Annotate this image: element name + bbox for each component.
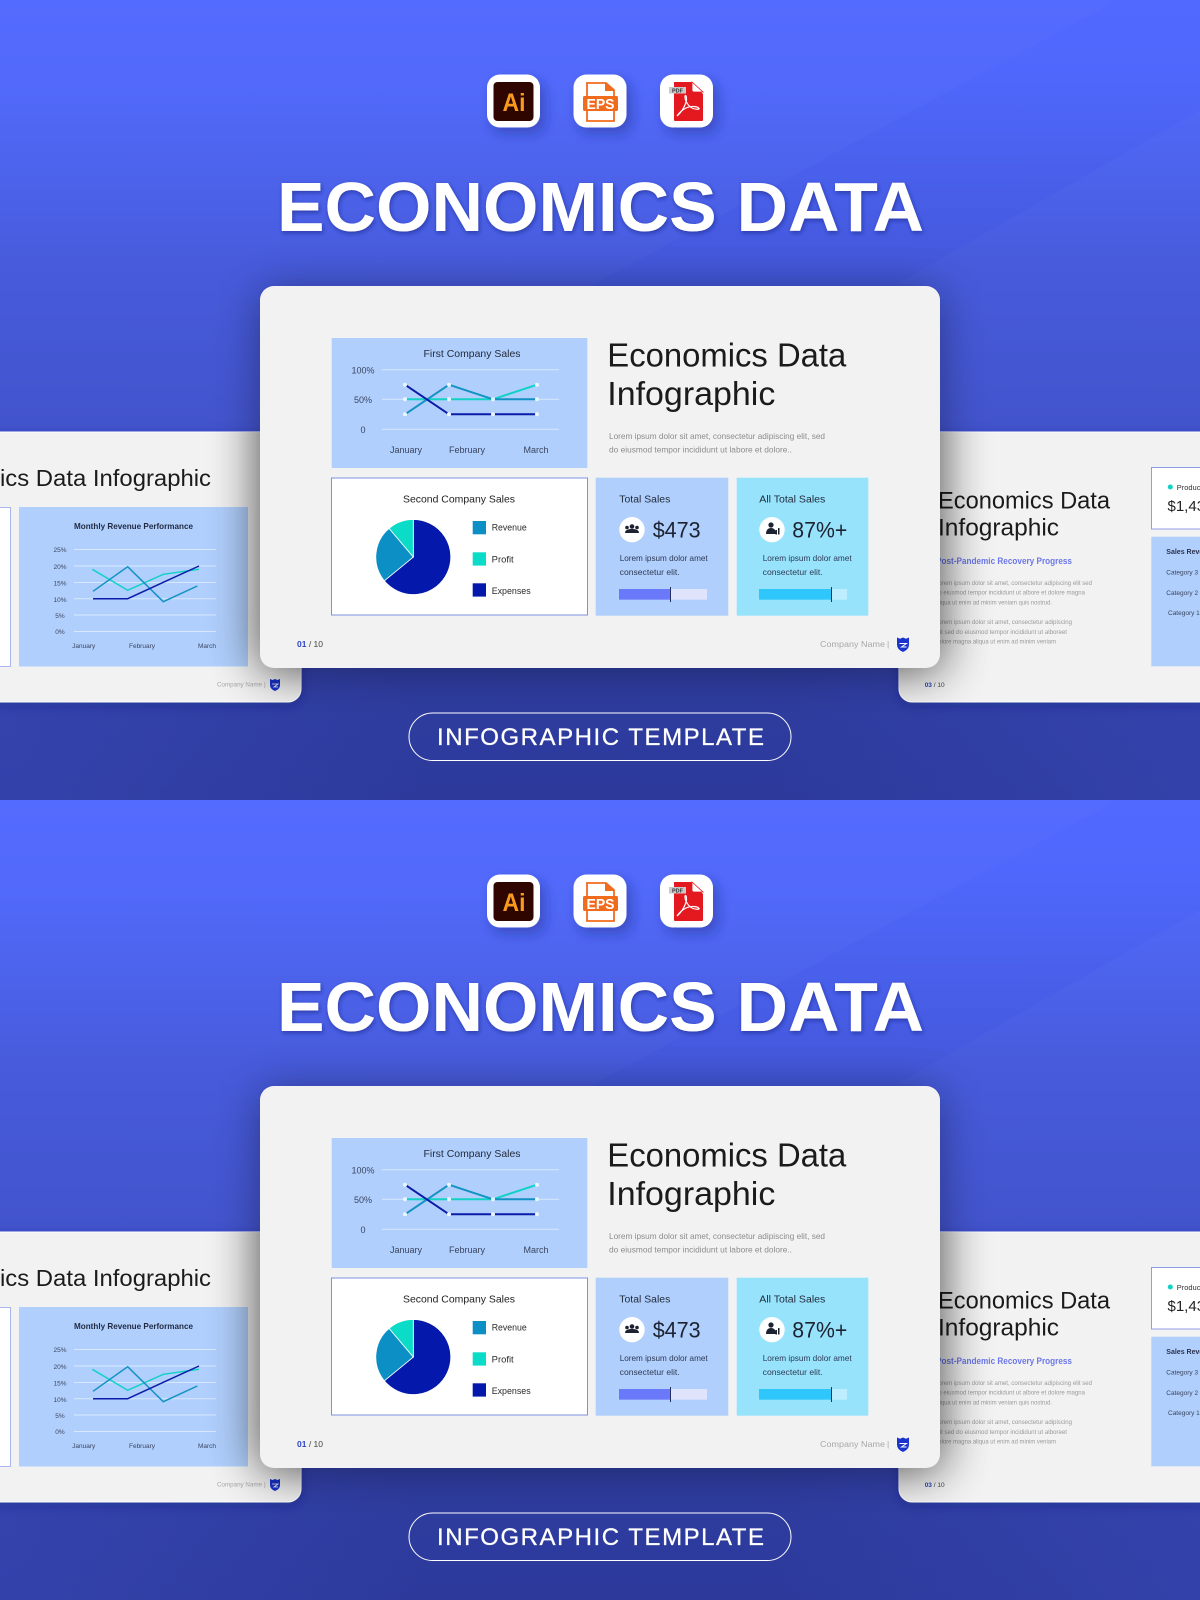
body text: [935, 581, 1092, 646]
legend: [473, 521, 531, 597]
subtitle pill: [409, 1513, 791, 1560]
line chart: monthly revenue: 20%: [53, 564, 67, 571]
page number: 03 / 10: [925, 1482, 945, 1489]
stat card: total sales: Total Sales: [619, 495, 670, 506]
icon: EPS file: EPS: [586, 96, 614, 113]
top tile: [0, 0, 1200, 800]
line chart: monthly revenue: 15%: [53, 580, 67, 588]
line chart: monthly revenue: February: [129, 643, 156, 650]
pie chart: second company sales: Second Company Sales: [403, 494, 515, 506]
panel: right slide: [899, 1232, 1200, 1502]
format icons: [487, 874, 713, 928]
icon: PDF file: [660, 874, 713, 928]
body text: aliqua ut enim ad minim veniam quis nostrud.: [935, 1400, 1052, 1406]
line chart: monthly revenue: January: [72, 1443, 96, 1450]
line chart: first company sales: 0: [360, 425, 366, 435]
line chart: first company sales: 100%: [351, 366, 375, 376]
body text: [935, 1381, 1092, 1446]
line chart: first company sales: January: [390, 445, 423, 455]
stat card: all total sales: [737, 1278, 868, 1416]
line chart: monthly revenue: 0%: [55, 1429, 65, 1436]
legend: Expenses: [492, 586, 531, 596]
icon: EPS file: [574, 874, 626, 928]
white panel: [0, 1308, 10, 1466]
body text: dolore magna aliqua ut enim ad minim veniam: [935, 1440, 1056, 1446]
slide heading: [938, 1287, 1111, 1341]
line chart: first company sales: February: [449, 1245, 486, 1255]
line chart: first company sales: 0: [360, 1225, 366, 1235]
body text: do eiusmod tempor incididunt ut labore et dolore..: [609, 1245, 792, 1255]
slide heading: Infographic: [607, 376, 775, 413]
stat card: all total sales: Lorem ipsum dolor amet: [763, 1353, 852, 1363]
body text: [609, 431, 825, 455]
line chart: monthly revenue: January: [72, 643, 96, 650]
legend: Profit: [492, 555, 514, 565]
slide heading: [938, 487, 1111, 541]
line chart: first company sales: First Company Sales: [424, 1148, 520, 1160]
progress bar: [759, 1387, 847, 1402]
line chart: first company sales: February: [449, 445, 486, 455]
sales revenue card: Category 2: [1166, 1390, 1198, 1397]
line chart: monthly revenue: 5%: [55, 1413, 65, 1420]
line chart: first company sales: First Company Sales: [424, 348, 520, 360]
slide heading: [607, 1138, 847, 1213]
company footer: |: [887, 1439, 889, 1449]
body text: Lorem ipsum dolor sit amet, consectetur adipiscing: [935, 620, 1072, 626]
body text: Lorem ipsum dolor sit amet, consectetur adipiscing elit, sed: [609, 1231, 825, 1241]
stat card: all total sales: Lorem ipsum dolor amet: [763, 553, 852, 563]
body text: Lorem ipsum dolor sit amet, consectetur adipiscing elit sed: [935, 581, 1092, 587]
progress bar: [619, 587, 707, 602]
title: ECONOMICS DATA: [277, 168, 924, 246]
line chart: monthly revenue: 10%: [53, 597, 67, 604]
company footer: Company Name: [820, 639, 885, 649]
icon: team: [619, 1317, 645, 1342]
page number: 03 / 10: [925, 682, 945, 689]
line chart: monthly revenue: 25%: [53, 547, 67, 554]
panel: main slide: [260, 1086, 940, 1468]
company footer: [820, 1438, 909, 1452]
slide heading: Economics Data: [938, 487, 1111, 514]
line chart: first company sales: March: [523, 445, 549, 455]
body text: dolore magna aliqua ut enim ad minim veniam: [935, 640, 1056, 646]
icon: PDF file: PDF: [672, 88, 684, 94]
background: [0, 800, 1200, 1600]
line chart: monthly revenue: Monthly Revenue Performance: [74, 1321, 193, 1331]
stat card: total sales: [596, 478, 728, 616]
slide heading: Economics Data: [938, 1287, 1111, 1314]
sales revenue card: Category 3: [1166, 1370, 1198, 1377]
stat card: all total sales: consectetur elit.: [763, 1367, 823, 1377]
subheading: Post-Pandemic Recovery Progress: [936, 1356, 1072, 1366]
background: [0, 0, 1200, 800]
stat card: total sales: consectetur elit.: [620, 1367, 680, 1377]
body text: [609, 1231, 825, 1255]
stat card: all total sales: consectetur elit.: [763, 567, 823, 577]
panel: left slide: [0, 432, 301, 702]
stat card: all total sales: All Total Sales: [759, 495, 825, 506]
sales revenue card: Category 1: [1168, 1410, 1200, 1417]
product card: [1152, 468, 1200, 529]
company footer: Company Name: [820, 1439, 885, 1449]
icon: Adobe Illustrator: [487, 74, 540, 128]
panel: main slide: [260, 286, 940, 668]
body text: elit sed do eiusmod tempor incididunt ut alboreet: [935, 630, 1067, 636]
icon: PDF file: [660, 74, 713, 128]
line chart: monthly revenue: 5%: [55, 613, 65, 620]
icon: PDF file: PDF: [672, 888, 684, 894]
line chart: first company sales: March: [523, 1245, 549, 1255]
page number: 01 / 10: [297, 639, 323, 649]
line chart: monthly revenue: February: [129, 1443, 156, 1450]
line chart: monthly revenue: Monthly Revenue Performance: [74, 521, 193, 531]
stat card: total sales: $473: [653, 517, 701, 542]
stat card: all total sales: 87%+: [792, 1317, 847, 1342]
line chart: monthly revenue: 10%: [53, 1397, 67, 1404]
slide heading: Economics Data: [607, 338, 847, 375]
line chart: first company sales: [332, 1138, 587, 1268]
title: ECONOMICS DATA: [277, 968, 924, 1046]
line chart: first company sales: January: [390, 1245, 423, 1255]
slide heading: Economics Data: [607, 1138, 847, 1175]
slide heading: Infographic: [938, 514, 1059, 541]
progress bar: [759, 587, 847, 602]
icon: person with chart: [759, 517, 785, 542]
slide footer: Company Name: [217, 682, 262, 688]
legend: Profit: [492, 1355, 514, 1365]
company footer: |: [887, 639, 889, 649]
body text: aliqua ut enim ad minim veniam quis nostrud.: [935, 600, 1052, 606]
line chart: monthly revenue: March: [198, 643, 216, 650]
stat card: total sales: Lorem ipsum dolor amet: [620, 1353, 708, 1363]
slide heading: ics Data Infographic: [0, 465, 211, 491]
line chart: first company sales: [332, 338, 587, 468]
legend: Revenue: [492, 523, 527, 533]
icon: EPS file: [574, 74, 626, 128]
slide footer: [217, 1479, 280, 1491]
stat card: total sales: Lorem ipsum dolor amet: [620, 553, 708, 563]
subtitle pill: INFOGRAPHIC TEMPLATE: [437, 1524, 764, 1551]
subheading: Post-Pandemic Recovery Progress: [936, 556, 1072, 566]
body text: Lorem ipsum dolor sit amet, consectetur adipiscing: [935, 1420, 1072, 1426]
slide footer: |: [264, 1482, 266, 1488]
line chart: first company sales: 50%: [354, 395, 372, 405]
stat card: all total sales: All Total Sales: [759, 1295, 825, 1306]
line chart: monthly revenue: 25%: [53, 1347, 67, 1354]
page number: 01 / 10: [297, 1439, 323, 1449]
sales revenue card: Category 2: [1166, 590, 1198, 597]
slide footer: [217, 679, 280, 691]
line chart: monthly revenue: [19, 507, 248, 666]
company footer: [820, 638, 909, 652]
icon: Adobe Illustrator: Ai: [502, 89, 526, 117]
body text: Lorem ipsum dolor sit amet, consectetur adipiscing elit sed: [935, 1381, 1092, 1387]
line chart: monthly revenue: 0%: [55, 629, 65, 636]
icon: EPS file: EPS: [586, 896, 614, 913]
sales revenue card: Category 3: [1166, 570, 1198, 577]
panel: left slide: [0, 1232, 301, 1502]
body text: do eiusmod tempor incididunt ut albore et dolore magna: [935, 1390, 1086, 1396]
body text: do eiusmod tempor incididunt ut labore et dolore..: [609, 445, 792, 455]
body text: Lorem ipsum dolor sit amet, consectetur adipiscing elit, sed: [609, 431, 825, 441]
line chart: monthly revenue: 15%: [53, 1380, 67, 1388]
subtitle pill: [409, 713, 791, 760]
slide heading: Infographic: [938, 1314, 1059, 1341]
pie chart: second company sales: Second Company Sales: [403, 1294, 515, 1306]
white panel: [0, 508, 10, 666]
panel: right slide: [899, 432, 1200, 702]
slide footer: |: [264, 682, 266, 688]
sales revenue card: [1151, 1337, 1200, 1466]
stat card: total sales: [596, 1278, 728, 1416]
icon: Adobe Illustrator: Ai: [502, 889, 526, 917]
format icons: [487, 74, 713, 128]
product card: [1152, 1268, 1200, 1329]
icon: person with chart: [759, 1317, 785, 1342]
line chart: monthly revenue: [19, 1307, 248, 1466]
stat card: total sales: Total Sales: [619, 1295, 670, 1306]
body text: do eiusmod tempor incididunt ut albore et dolore magna: [935, 590, 1086, 596]
stat card: total sales: $473: [653, 1317, 701, 1342]
subtitle pill: INFOGRAPHIC TEMPLATE: [437, 724, 764, 751]
line chart: monthly revenue: 20%: [53, 1364, 67, 1371]
sales revenue card: Category 1: [1168, 610, 1200, 617]
body text: elit sed do eiusmod tempor incididunt ut alboreet: [935, 1430, 1067, 1436]
line chart: first company sales: 100%: [351, 1166, 375, 1176]
legend: Revenue: [492, 1323, 527, 1333]
sales revenue card: [1151, 537, 1200, 666]
legend: [473, 1321, 531, 1397]
stat card: all total sales: 87%+: [792, 517, 847, 542]
stat card: total sales: consectetur elit.: [620, 567, 680, 577]
pie chart: second company sales: [332, 1278, 588, 1415]
icon: Adobe Illustrator: [487, 874, 540, 928]
bottom tile: [0, 800, 1200, 1600]
slide footer: Company Name: [217, 1482, 262, 1488]
slide heading: [607, 338, 847, 413]
icon: team: [619, 517, 645, 542]
stat card: all total sales: [737, 478, 868, 616]
pie chart: second company sales: [332, 478, 588, 615]
slide heading: ics Data Infographic: [0, 1265, 211, 1291]
slide heading: Infographic: [607, 1176, 775, 1213]
line chart: monthly revenue: March: [198, 1443, 216, 1450]
progress bar: [619, 1387, 707, 1402]
legend: Expenses: [492, 1386, 531, 1396]
line chart: first company sales: 50%: [354, 1195, 372, 1205]
